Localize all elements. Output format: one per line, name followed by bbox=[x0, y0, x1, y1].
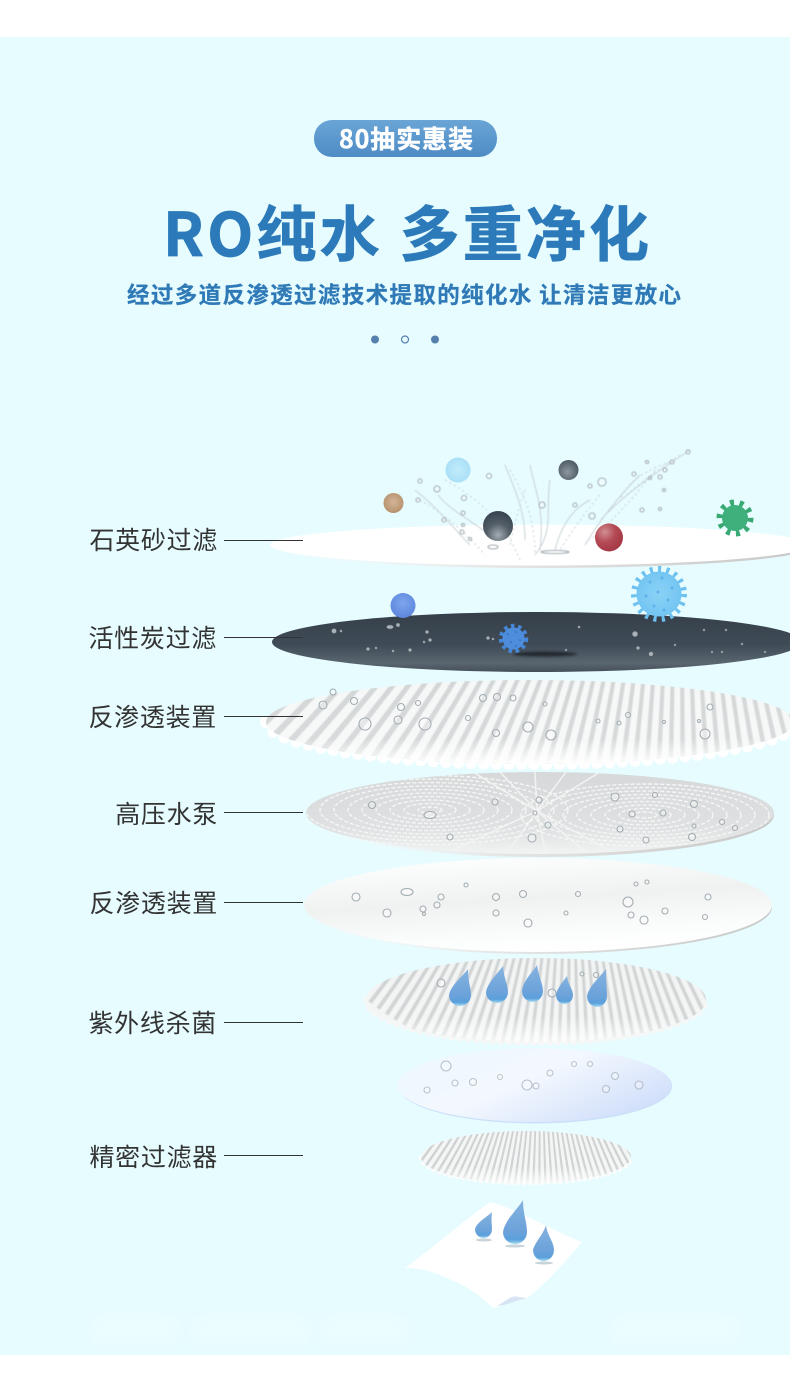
label: 精密过滤器: 精密过滤器 bbox=[89, 1138, 218, 1174]
subtitle: 经过多道反渗透过滤技术提取的纯化水 让清洁更放心 bbox=[127, 278, 681, 310]
layer 8: precision filter ribbed disc bbox=[418, 1131, 632, 1186]
layer 7: blue-tinted membrane disc bbox=[397, 1048, 672, 1124]
droplets on membrane bbox=[352, 880, 711, 927]
particle: dark ball bbox=[483, 511, 513, 541]
layer 1: quartz sand disc bbox=[270, 524, 790, 568]
label: 石英砂过滤: 石英砂过滤 bbox=[89, 521, 218, 557]
label: 紫外线杀菌: 紫外线杀菌 bbox=[88, 1004, 217, 1040]
water splash bbox=[415, 450, 690, 560]
droplets on UV disc bbox=[437, 972, 598, 997]
virus: green bbox=[720, 502, 750, 534]
wet wipe sheet bbox=[405, 1202, 582, 1308]
blue water drops on wipe bbox=[475, 1200, 554, 1264]
droplets on carbon bbox=[332, 623, 766, 656]
droplets on pump disc bbox=[368, 792, 738, 843]
droplets on ribs bbox=[319, 689, 713, 740]
label: 活性炭过滤: 活性炭过滤 bbox=[88, 619, 217, 655]
blue water drops on UV disc bbox=[449, 965, 607, 1007]
layer 3: ribbed reverse osmosis disc bbox=[260, 680, 790, 770]
particle: grey ball bbox=[558, 460, 578, 480]
layer 2: activated carbon disc bbox=[272, 612, 790, 672]
label: 反渗透装置 second: 反渗透装置 bbox=[89, 884, 218, 920]
title: RO纯水 多重净化 bbox=[163, 187, 649, 274]
label: 反渗透装置: 反渗透装置 bbox=[88, 698, 217, 734]
particle: light blue ball bbox=[446, 458, 470, 482]
virus: large light blue bbox=[635, 570, 683, 618]
virus: small blue bbox=[501, 626, 526, 651]
droplets on blue membrane bbox=[424, 1061, 643, 1093]
faint bottom watermark bbox=[90, 1315, 740, 1345]
layer 4: high pressure pump disc bbox=[292, 772, 774, 857]
layer 6: UV ribbed disc bbox=[363, 958, 708, 1046]
pagination dots bbox=[371, 336, 439, 344]
label: 高压水泵: 高压水泵 bbox=[115, 795, 218, 831]
layer 5: reverse osmosis membrane disc bbox=[304, 858, 772, 954]
particle: blue ball bbox=[390, 593, 416, 618]
particle: red ball bbox=[595, 524, 623, 552]
badge: 80抽实惠装: 80抽实惠装 bbox=[339, 120, 473, 156]
particle: tan ball bbox=[384, 493, 404, 513]
